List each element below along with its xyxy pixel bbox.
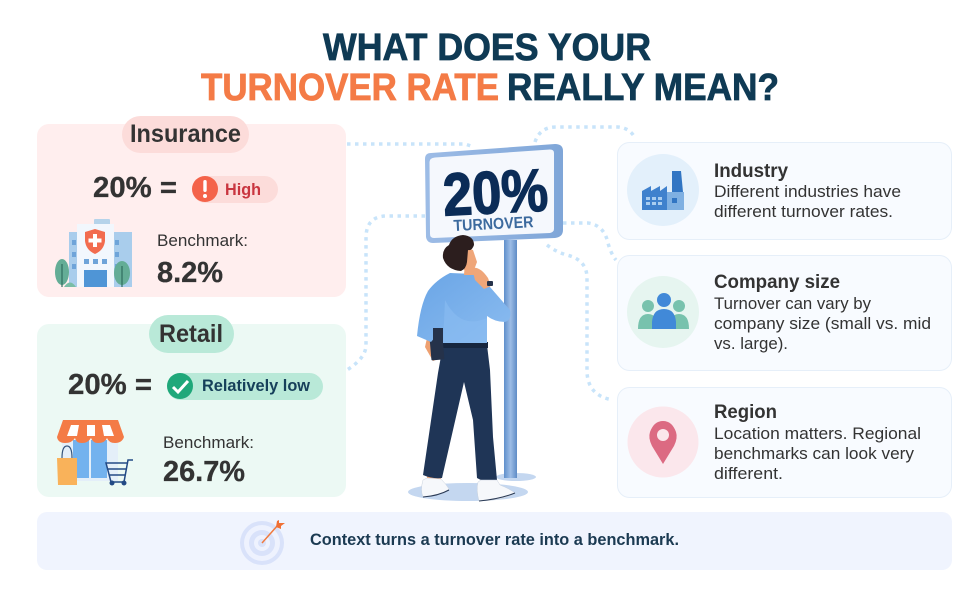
text: company size: Company size [714,272,840,293]
dotted connectors [347,127,635,400]
callout: context [37,512,952,570]
ground shadows [408,473,536,501]
benchmark: insurance [157,231,248,289]
heading: retail: Retail [159,320,223,348]
hair [443,235,474,271]
icon: factory [627,154,699,226]
title: TURNOVER RATE [201,67,499,109]
text: company size: Turnover can vary by [714,294,871,313]
shoes [422,478,449,497]
text: industry: Different industries have [714,182,901,201]
illustration: person looking at turnover sign [408,144,563,501]
sign board: 20% [441,156,549,229]
sign post [504,240,517,478]
text: region: Region [714,402,777,423]
badge: relatively low [167,373,323,400]
stat: 20 percent equals: 20% = [68,369,152,401]
shirt [417,273,510,343]
heading: insurance: Insurance [130,120,241,148]
title: REALLY MEAN? [507,67,779,109]
panel: company size [618,256,952,370]
text: industry: different turnover rates. [714,202,893,221]
sign board [425,144,563,243]
text: context: Context turns a turnover rate into a benchmark. [310,530,679,549]
icon: hospital [55,219,132,287]
benchmark: insurance: Benchmark: [157,231,248,250]
panel: region [618,388,952,498]
text: region: different. [714,464,783,483]
text: company size [714,272,931,353]
text: region: Location matters. Regional [714,424,921,443]
book [429,326,444,360]
benchmark: retail [163,433,254,488]
panel: retail [37,315,346,497]
icon: store [57,420,133,486]
sign board: TURNOVER [453,214,534,235]
stat: 20 percent equals: 20% = [93,172,177,204]
benchmark: insurance: 8.2% [157,257,223,289]
text: company size: company size (small vs. mid [714,314,931,333]
text: industry [714,161,901,221]
panel: industry [618,142,952,240]
badge: high [192,176,278,203]
benchmark: retail: Benchmark: [163,433,254,452]
benchmark: retail: 26.7% [163,456,245,488]
title: WHAT DOES YOUR [323,27,651,69]
text: region [714,402,921,483]
text: company size: vs. large). [714,334,788,353]
raised hand and watch [472,268,491,289]
panel: insurance [37,116,346,297]
badge: relatively low: Relatively low [202,376,311,395]
neck and face [464,262,476,275]
badge: high: High [225,180,261,199]
text: region: benchmarks can look very [714,444,914,463]
ankles [427,472,496,486]
trousers [423,345,497,482]
text: industry: Industry [714,161,788,182]
icon: people [627,276,699,348]
heading: retail [149,315,234,353]
man [417,235,515,501]
left hand [425,338,440,361]
title [201,27,779,109]
icon: location pin [628,406,698,478]
icon: target with arrow [240,520,285,565]
